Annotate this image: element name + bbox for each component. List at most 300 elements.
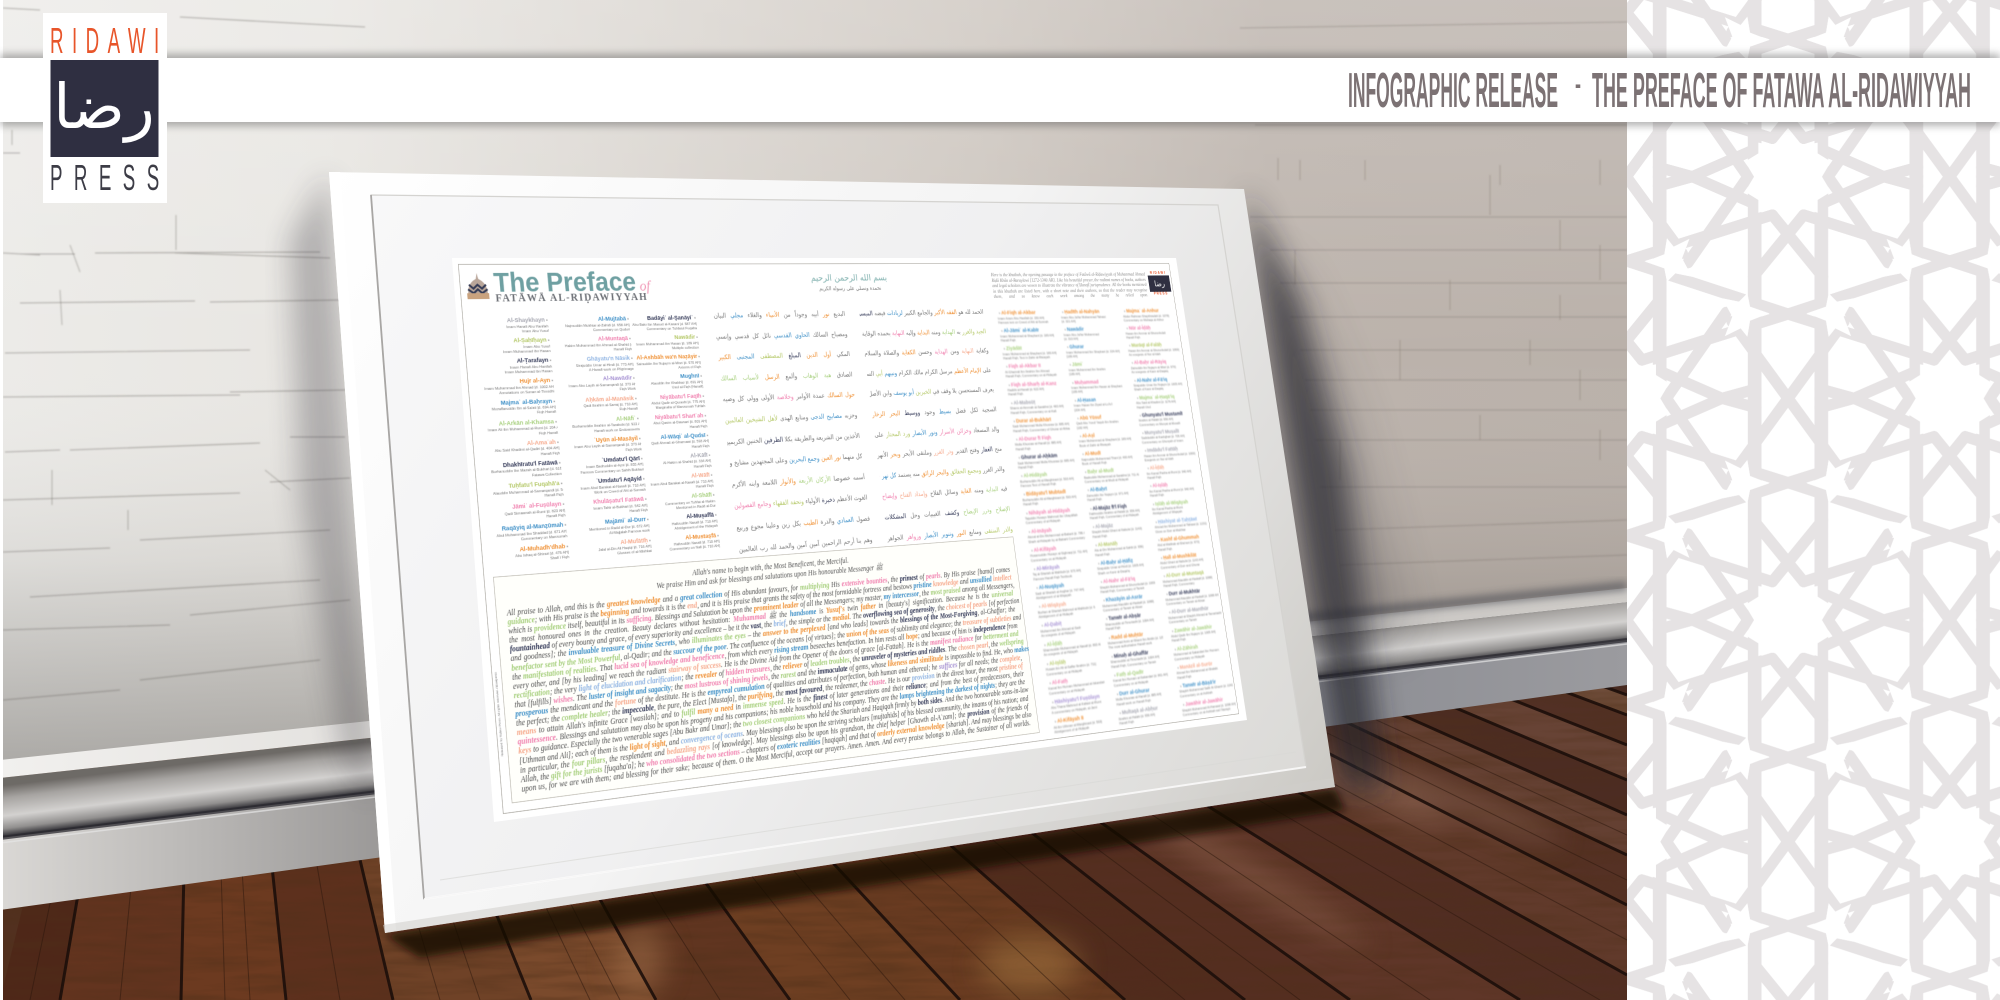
- right book list column 1: Al-Mabsūṭ: [1013, 399, 1036, 406]
- right book list column 1: Imam Muhammad al-Shaybani [d. 189 AH]: [1002, 351, 1057, 356]
- book list column 1: Ḥujr al-Ayn: [519, 377, 551, 385]
- right book list column 3: Al-Iṣlāḥ: [1152, 482, 1168, 489]
- book list column 3: Usul al-Fiqh [Hanafi]: [672, 384, 703, 390]
- right book list column 3: Gloss on Durr al-Mukhtar: [1155, 528, 1186, 534]
- book list column 3: Hanafi Fiqh: [689, 424, 708, 429]
- book list column 3: Al-Mustaṣfā: [685, 532, 716, 541]
- book list column 2: Majāmiʿ al-Durr: [605, 516, 646, 526]
- right book list column 2: Imam Muhammad Ibn Shaybani [d. 334 AH]: [1066, 349, 1120, 355]
- right book list column 1: Tajuddin Husayn Mahmud ibn Ubaydillah: [1025, 513, 1078, 521]
- right book list column 2: Sharh on Kanz al-Daqa'iq: [1098, 569, 1130, 576]
- book list column 1: Imam Hanafi Abu Hanifah: [510, 364, 552, 370]
- right book list column 1: Hanafi Fiqh: [1001, 338, 1016, 343]
- book list column 3: Qadi Ahmad al-Ghaznawi [d. 593 AH]: [651, 439, 709, 446]
- translation paragraph: [Uthman and Ali]; each of them is the light of sight, and convergence of oceans. May blessings also be upon the striving scholars [mujtahids] of his blessed community, the imams of his nation; and: [519, 694, 1029, 766]
- translation paragraph: the most honoured ones in the creation. Beauty declares without hesitation: Muhammad ﷺ the handsome is Yusuf's twin father in [beauty's] signification. Because he is the universal: [509, 589, 1014, 645]
- book list column 3: Abridgement of the Hidayah: [674, 524, 718, 531]
- right book list column 2: Hanafi Fiqh, Commentary on Tanwir: [1111, 660, 1156, 669]
- book list column 2: ʿUmdatu'l Aqāyid: [596, 475, 642, 485]
- right book list column 2: Badruddin Muhammad al-Sarakhsi [d. 711 AH]: [1084, 472, 1140, 480]
- book list column 2: Jalal al-Din Ali Haqiqi [d. 716 AH]: [598, 544, 652, 553]
- book list column 2: ʿUmdatu'l Qārī: [601, 455, 640, 464]
- book list column 3: Al-Shāfī: [691, 492, 712, 500]
- right book list column 3: Abridgement of Wiqayah: [1152, 510, 1183, 516]
- right book list column 2: Jāmiʿ: [1072, 361, 1084, 368]
- right book list column 1: Commentary on al-Hidayah: [1031, 556, 1067, 563]
- right book list column 2: Book of Zahir al-Riwayah: [1079, 442, 1111, 448]
- arabic khutbah column A: حول السالك عمدة الأوامر وخلاصة الأولى وولي كل وصيه: [722, 392, 855, 403]
- right book list column 3: Majmaʿ al-Ḥaqā'iq: [1139, 393, 1175, 401]
- arabic khutbah column B: السجية لكل فضل بسيط وجود ووسيط البحر الزخار: [872, 406, 997, 418]
- right book list column 3: Al-Durr al-Manthūr: [1171, 605, 1209, 616]
- right book list column 1: Husain ibn Ali al-Saffar Ibrahim [d. 711]: [1046, 662, 1096, 672]
- right book list column 1: Ziyādāt: [1006, 345, 1022, 352]
- book list column 2: Imam Badruddin al-Ayni [d. 855 AH]: [586, 462, 644, 470]
- right book list column 2: Minaḥ al-Ghaffār: [1113, 649, 1149, 660]
- arabic khutbah column B: فيه البداية ومنه الغاية وسائل الفلاح وإمداد الفتاح وإيضاح: [882, 486, 1008, 501]
- right book list column 1: Taj al-Shariah al-Mahbubi [d. 673 AH]: [1033, 569, 1081, 577]
- right book list column 3: Muhammad al-Shaykh Ahmad al-Tamartashi: [1168, 611, 1222, 620]
- banner title: INFOGRAPHIC RELEASE: [1348, 64, 1558, 118]
- bismillah heading: بسم الله الرحمن الرحيم: [810, 272, 887, 283]
- translation heading: Allah's name to begin with, the Most Beneficent, the Merciful.: [692, 556, 849, 577]
- right book list column 1: Famous Text of Hanafi Fiqh: [1020, 482, 1056, 488]
- right book list column 3: Commentary on Ghunyah of Imam: [1142, 439, 1183, 445]
- right book list column 2: Kamal Ibn Humam al-Sakandari [d. 861 AH]: [1113, 673, 1168, 683]
- book list column 2: Aḥkām al-Manāsik: [585, 395, 634, 403]
- translation paragraph: fountainhead of every bounty and grace, of every superiority and excellence – be it the vast, the brief, the simple or the medial. The overflowing sea of generosity, the choicest of pearls [of perfection: [509, 597, 1020, 654]
- translation paragraph: in particular, the four pillars, the resplendent and bedazzling rays [of knowledge]. May blessings also be upon his grandson, the chief helper [Ghawth al-Aʿzam]; the provision of the friends of: [520, 702, 1029, 775]
- right book list column 2: [189 AH]: [1072, 390, 1083, 394]
- book list column 2: A Hanafi work on Pilgrimage: [589, 367, 634, 373]
- logo: Ridawi Press: RIDAWI: [50, 22, 159, 62]
- right book list column 1: Imam Muhammad al-Shaybani [d. 189 AH]: [1000, 333, 1054, 338]
- book list column 2: Glosses of al-Mishkat: [617, 549, 652, 556]
- right book list column 1: Ghurar al-Aḥkām: [1021, 452, 1058, 461]
- logo: Ridawi Press: PRESS: [50, 159, 159, 199]
- right book list column 1: Hanafi Fiqh: [1023, 502, 1038, 507]
- right book list column 2: [1060, 308, 1168, 726]
- book list column 3: Hanafi Fiqh: [696, 483, 714, 489]
- right book list column 3: Munyatu'l Muṣallī: [1144, 428, 1180, 436]
- right book list column 1: Hanafi Fiqh: [1018, 465, 1033, 470]
- book list column 2: Al-Mujtabā: [598, 315, 626, 323]
- translation paragraph: that [fulfills] wishes. The luster of insight and sagacity; the most lustrous of shining jewels, the rarest and the immaculate of gems, whose likeness and similitude is impossible to find. He, who makes: [514, 645, 1029, 710]
- right book list column 2: [204 AH]: [1074, 408, 1085, 412]
- right book list column 1: Burhanuddin Ali al-Marghinani [d. 593 AH]: [1020, 477, 1074, 484]
- right book list column 2: Multaqā al-Abḥur: [1122, 705, 1158, 716]
- mini logo: RIDAWI: [1150, 271, 1166, 275]
- book list column 3: Mughnī: [680, 373, 700, 380]
- right book list column 3: Hanafi Fiqh: [1158, 547, 1172, 552]
- book list column 3: Hanafi Fiqh: [694, 464, 712, 469]
- picture frame: [329, 172, 1335, 933]
- right book list column 1: Durar al-Bukhārī: [1016, 416, 1051, 424]
- right book list column 1: Al-Durar fī Fiqh: [1018, 434, 1052, 443]
- book list column 2: Al-Nawādir: [603, 375, 632, 383]
- right book list column 2: Hanafi Fiqh: [1106, 626, 1121, 632]
- book list column 3: Imam Muhammad ibn Hasan [d. 189 AH]: [636, 341, 699, 347]
- vertical credit line: Released by Ridawi Press. All rights reserved. ridawipress: [494, 672, 504, 757]
- book list column 1: Hanafi Fiqh: [546, 513, 566, 519]
- book list column 2: Ghāyatu'n Nāsik: [586, 355, 630, 363]
- right book list column 2: Shaykh Muhammad al-Shurunbulali [d. 1069]: [1100, 581, 1156, 590]
- right book list column 2: Zainuddin Ibn Nujaym [d. 971 AH]: [1086, 491, 1129, 498]
- book list column 3: Commentary on Nafi [d. 710 AH]: [669, 544, 720, 552]
- right book list column 2: Mulla Khusraw al-Hanafi [d. 885 AH]: [1116, 692, 1162, 702]
- arabic khutbah column B: والدر المنتقى ومنابع النور وتنوير الأبصار وزواهر الجواهر: [887, 526, 1013, 542]
- right book list column 2: Sirajuddin Umar al-Hindi [d. 1005 AH]: [1097, 563, 1144, 571]
- right book list column 2: Baḥr al-Mudī: [1087, 467, 1114, 475]
- wooden floor planks: [3, 685, 1627, 1000]
- right book list column 2: Al-Majāz fī'l Fiqh: [1092, 503, 1127, 512]
- right book list column 3: Abdur Rahman Shaykhzadah [d. 1078]: [1123, 314, 1169, 318]
- book list column 2: Al-Mufātīḥ: [620, 537, 648, 546]
- right book list column 3: Shaykh Muhammad Salih Al-Ghazzi [d. 1041]: [1179, 683, 1234, 694]
- right book list column 1: Abu Thana Mahmud al-Kafawi al-Rumi: [1051, 700, 1102, 711]
- right book list column 3: Commentary on Hidayah: [1174, 654, 1205, 662]
- right book list column 1: Fiqh al-Akbar II: [1008, 363, 1041, 370]
- book list column 2: Commentary on Quduri: [593, 327, 630, 332]
- right book list column 2: Imam Abu Ja'far Muhammad Tahawi: [1061, 315, 1106, 319]
- right book list column 2: Muhammad Alauddin al-Haskafi [d. 1088]: [1102, 599, 1154, 608]
- right book list column 2: Commentary on al-Mudi al-Hidayah: [1084, 477, 1129, 484]
- right book list column 3: Commentary on al-Ashbah: [1180, 690, 1213, 699]
- book list column 1: Imam Abu Yusuf: [522, 329, 549, 334]
- right book list column 1: Al-Hidāyah: [1023, 471, 1048, 479]
- right book list column 3: Ḥall al-Mushkilāt: [1163, 552, 1197, 561]
- right book list column 1: Shams al-Aimmah al-Sarakhsi [d. 483 AH]: [1010, 404, 1064, 411]
- book list column 2: Khulāṣatu'l Fatāwā: [593, 496, 644, 506]
- book list column 3: Abul Qasim al-Dawsari [d. 801 AH]: [653, 419, 707, 426]
- logo: Ridawi Press: [43, 13, 167, 203]
- arabic khutbah column B: يعرف المستحسن بلا وقف في الخيرين أبو يوسف وابن الأصل: [868, 387, 994, 398]
- right book list column 3: Zainuddin ibn Nujaym al-Misri [d. 970]: [1131, 365, 1176, 370]
- frame cast shadows: [290, 172, 1400, 958]
- subheading: Fatawa al-Ridawiyyah: FATĀWĀ AL-RIḌAWIYYAH: [495, 291, 648, 304]
- arabic khutbah column B: الإصلاح ودرر الإيضاح وكشف الغيبيات وحل المشكلات: [884, 506, 1010, 521]
- right book list column 1: Al-Ḍabiṭ: [1044, 620, 1062, 629]
- right book list column 1: Husamuddin Husayn al-Sighnaqi [d. 711 AH]: [1030, 549, 1088, 558]
- right book list column 1: An exegesis of al-Hidayah: [1041, 631, 1075, 638]
- book list column 2: Imam Tahir al-Bukhari [d. 542 AH]: [593, 503, 648, 511]
- right book list column 1: [997, 309, 1105, 735]
- right book list column 2: Hanafi Fiqh, Commentary of Tanwir: [1100, 586, 1145, 594]
- book list column 1: Imam Muhammad ibn Ahmad [d. 1002 AH]: [484, 384, 555, 391]
- mini logo: رضا: [1154, 279, 1165, 289]
- arabic khutbah column B: وكفاية النهاية ومن الهداية وحسن الكفاية والصلاة والسلام: [864, 348, 989, 357]
- translation paragraph: which is providence itself, beautiful in its sufficing. Blessings and Salutation be upon the prominent leader of all the Messengers; my master, my intercessor, the most praised among all Messengers,: [508, 581, 1015, 636]
- left photo edge: [0, 0, 3, 1000]
- right book list column 2: Ala al-Din Muhammad al-Sahib [d. 956]: [1094, 545, 1144, 553]
- mini logo: [1148, 271, 1172, 296]
- right book list column 1: Sadr al-Shariah al-Asghar [d. 747 AH]: [1035, 587, 1084, 596]
- book list column 3: Al-Muṣaffā: [686, 512, 714, 521]
- right book list column 2: Commentary on al-Hidayah: [1114, 679, 1149, 688]
- book list column 1: Abu Said Khadimi al-Qadiri [d. 404 AH]: [495, 446, 560, 454]
- right book list column 2: Fatḥ al-Qadīr: [1116, 669, 1144, 678]
- book list column 3: Hanafi Fiqh: [692, 444, 710, 449]
- arabic khutbah column A: أسمه خصوصا الأركان الأربعة والأنوار اللامعة وابنه الأكرم: [732, 474, 865, 489]
- translation paragraph: every other, and [by his leading] we reach the radiant stairway of success. He is the Divine Aid from the Opener of the doors of grace [al-Fattah]. He is the manifest radiance for betterment and: [513, 629, 1019, 691]
- right book list column 2: Shamsuddin al-Timurtashi [d. 1004 AH]: [1110, 655, 1160, 665]
- right book list column 3: Abdul Ghani al-Nabulsi [d. 1143 AH]: [1160, 558, 1203, 566]
- book list column 2: Imam Abu Layth al-Samarqandi [d. 373 AH]: [568, 382, 636, 389]
- book list column 3: Imam Abul Barakat al-Nasafi [d. 710 AH]: [650, 479, 713, 487]
- right book list column 1: Al-Fatḥ: [1052, 678, 1068, 686]
- book list column 1: Al-Amaʿah: [527, 438, 556, 447]
- right book list column 1: Nihāyah al-Hidāyah: [1028, 507, 1070, 516]
- right book list column 3: Hasan ibn Ammar al-Shurunbulali: [1125, 331, 1166, 336]
- right book list column 3: Zawāhir al-Jawāhir: [1174, 623, 1212, 634]
- book list column 3: Commentary on Tuhfatul Fuqaha: [646, 326, 697, 331]
- right book list column 2: Hanafi Fiqh: [1092, 534, 1107, 539]
- right book list column 2: [189 AH]: [1067, 355, 1078, 359]
- right book list column 2: Al-Baḥr al-Ḥāfiẓ: [1100, 557, 1133, 567]
- right book list column 3: Abu Said al-Khadimi [d. 1176 AH]: [1136, 400, 1176, 405]
- right book list column 1: Sadr Muhammad Mulla Khusraw [d. 885 AH]: [1012, 422, 1069, 429]
- book list column 1: Annotations on Sunan al-Tirmidhi: [499, 389, 554, 396]
- right book list column 3: Commentary on al-Ashbah wa'l Nazayir: [1183, 707, 1231, 717]
- translation paragraph: prosperous the mendicant and the fortune of the destitute. He is the empyreal cumulation of qualities and attributes of perfection, both human and ethereal; he suffices for all needs; the complete,: [515, 654, 1022, 719]
- right book list column 2: Tanwīr al-Abṣār: [1108, 612, 1141, 622]
- book list column 2: Al-Nāfiʿ: [616, 415, 636, 423]
- right book list column 2: Abū Yūsuf: [1079, 414, 1102, 421]
- book list column 2: Mentioned in Radd al-Dur [d. 672 AH]: [589, 523, 650, 532]
- book list column 1: Al-Muhadh'dhab: [519, 542, 566, 553]
- banner title: -: [1575, 68, 1581, 101]
- right book list column 3: Sharh of Kanz al-Daqaiq: [1134, 387, 1164, 392]
- book list column 1: Fiqh Hanafi: [539, 430, 558, 436]
- right book list column 1: Hanafi Fiqh, Text in Zahir al-Riwayah: [1003, 355, 1050, 361]
- book list column 3: Abu Bakr ibn Masud al-Kasani [d. 587 AH]: [632, 321, 697, 327]
- right book list column 1: Hadithi al-Hanafi [d. 622 AH]: [1007, 387, 1044, 393]
- right book list column 2: Al-Manāḥ: [1097, 540, 1118, 548]
- book list column 1: [484, 316, 570, 561]
- book list column 3: Marginalia of Manzumah Tuhfah: [656, 404, 705, 410]
- right book list column 1: Mulla Khusraw al-Hanafi [d. 885 AH]: [1015, 441, 1062, 447]
- arabic khutbah column A: وحزبه مصابيح الدجى ومنابع الهدى لأهل الشيخين العالمين: [725, 412, 858, 425]
- right book list column 1: Fiqh al-Sharḥ al-Kanz: [1011, 380, 1057, 388]
- right book list column 1: Hanafi Fiqh, Commentary of Ghurar al-Ahkam: [1013, 426, 1070, 433]
- right book list column 3: Al-Baḥr al-Rāyiq: [1134, 359, 1167, 366]
- right book list column 1: Al-Ghazzali Ibn Ibrahim Ibn Ahmad: [1005, 369, 1050, 374]
- translation paragraph: rectification; the very light of elucidation and clarification; the revealer of hidden treasures, the reliever of leaden troubles, the unraveler of mysteries and riddles. The chosen pearl, the wellspring: [513, 637, 1024, 700]
- book list column 2: Qadi Ibrahim al-Sarraj [d. 710 AH]: [583, 402, 638, 408]
- right book list column 3: Al-Īḍāḥ: [1149, 464, 1165, 471]
- book list column 3: Al-Ashbāh wa'n Naẓāyir: [636, 353, 698, 362]
- right book list column 3: Sirajuddin Umar ibn Nujaym [d. 1005 AH]: [1133, 382, 1182, 388]
- right book list column 2: Nawādir: [1067, 326, 1084, 333]
- book list column 3: Abdul Qadir al-Qurashi [d. 775 AH]: [651, 399, 705, 406]
- right book list column 1: Famous Hanafi Fiqh Textbook: [1033, 574, 1072, 582]
- book list column 1: Dhakhīratu'l Fatāwā: [503, 459, 558, 469]
- book list column 2: Al-Muntaqā: [598, 335, 628, 343]
- translation paragraph: Allah, the gift for the jurists [fuqaha'a]; he who consolidated the two sections – chapters of exoteric realities [haqiqah] and that of orderly external knowledge [shariah]. And may blessings be also: [520, 710, 1032, 784]
- book list column 1: Abu Ishaq al-Shirazi [d. 476 AH]: [515, 550, 569, 559]
- right book list column 2: Al-Nahr al-Fā'iq: [1103, 576, 1136, 585]
- right book list column 2: Muḥammad: [1074, 379, 1099, 386]
- book list column 3: Axioms of Fiqh: [678, 365, 701, 370]
- translation paragraph: [506, 566, 1032, 794]
- right book list column 3: Marāqī al-Falāḥ: [1131, 342, 1162, 349]
- book list column 1: Abul Muhammad Ibn Shaddad [d. 671 AH]: [496, 529, 568, 538]
- right book list column 1: A commentary on Hidayah, al-Jami: [1051, 705, 1097, 715]
- book list column 1: Muzaffaruddin Ibn al-Sa'ati [d. 694 AH]: [492, 405, 556, 412]
- skirting board: [0, 586, 1627, 910]
- right book list column 3: Commentary on Multaqa al-Abhur: [1123, 318, 1164, 322]
- poster: The Preface of Fatawa al-Ridawiyyah: [458, 263, 1239, 814]
- right book list column 3: Hanafi Fiqh, Commentary: [1163, 581, 1195, 588]
- right book list column 3: Ahmad Ibn Muhammad al-Shalabi: [1176, 667, 1218, 676]
- translation paragraph: guidance; with His praise is the beginning and towards it is the end, and it is His praise that grants the safety of the most formidable fortress and bestows pristine knowledge and unsullied intellect: [507, 573, 1012, 627]
- right book list column 3: Majmaʿ al-Anhur: [1126, 308, 1159, 314]
- right book list column 1: Al-Jāmiʿ al-Kabīr: [1003, 327, 1039, 334]
- book list column 3: Alauddin ibn Khabbaz [d. 691 AH]: [651, 380, 703, 386]
- book list column 3: Al-Kāfī: [690, 452, 708, 460]
- book list column 2: Hanafi work on Endowments: [594, 427, 640, 433]
- right book list column 2: The most authoritative Hanafi work: [1108, 641, 1152, 650]
- right book list column 2: Durr al-Ghurar: [1119, 687, 1150, 697]
- right book list column 1: Burhanuddin Ali al-Marghinani [d. 593 AH]: [1022, 495, 1076, 502]
- translation paragraph: the perfect; the complete healer; the impeccable, the pure, the Elect [Mustafa], the purifying, the most favoured, the redeemer, the chaste. He is our provision in the direst hour, the most pristine of: [516, 662, 1023, 728]
- book list column 3: Al-Wāqiʿ al-Qudsī: [660, 432, 706, 441]
- right book list column 3: Hasan ibn Ammar al-Shurunbulali [d. 1069]: [1128, 348, 1179, 353]
- right book list column 1: Commentary on al-Hidayah: [1046, 668, 1082, 677]
- right book list column 2: Imam Hasan Ibn Ziyad al-Lu'lu'i: [1074, 402, 1113, 408]
- translation paragraph: All praise to Allah, and this is the greatest knowledge and a great collection of His abundant favours, for multiplying His extensive bounties, the primest of pearls. By His praise [hamd] comes: [506, 566, 1010, 618]
- right book list column 3: Sadiduddin al-Kashghari [d. 705 AH]: [1141, 434, 1185, 441]
- right book list column 2: Shamsuddin al-Timurtashi [d. 1004 AH]: [1105, 618, 1154, 627]
- right book list column 2: Imam Muhammad Ibn Hasan al-Shaybani: [1071, 384, 1123, 390]
- right book list column 1: Hanafi Fiqh, Commentary on al-Kafi: [1010, 409, 1057, 415]
- right book list column 3: Ibn Kamal Pasha al-Rumi [d. 940 AH]: [1146, 469, 1191, 476]
- right book list column 1: Abridgement of al-Wiqayah: [1036, 593, 1072, 601]
- right book list column 2: Hanafi Fiqh: [1095, 552, 1110, 557]
- right book list column 1: Sharh al-Hidayah by al-Babarti Commentary: [1028, 535, 1085, 544]
- arabic khutbah column B: والد المسعاد وخزائن الأسرار ونور الأبصار ورد المحتار على: [874, 426, 1000, 439]
- picture mat: [371, 195, 1306, 899]
- right book list column 2: Al-Baḥrī: [1090, 486, 1107, 493]
- book list column 1: Al-Ṭarafayn: [517, 357, 549, 365]
- arabic khutbah column A: فصول العمادي والدرة الطيب بكل زين وعلينا مجوع وربيع: [736, 516, 870, 532]
- right book list column 2: Hanafi Fiqh, Commentary of al-Hidayah: [1090, 513, 1139, 521]
- right book list column 3: Nūr al-Īḍāḥ: [1128, 325, 1151, 331]
- right book list column 3: Commentary on Munyat al-Musalli: [1139, 421, 1180, 427]
- right book list column 1: Muhammad ibn Ahmad al-Sadr: [1040, 625, 1081, 634]
- right book list column 2: Hanafi Fiqh: [1087, 497, 1102, 502]
- book list column 1: Hanafi Fiqh: [541, 451, 560, 456]
- translation paragraph: means to attain Allah's infinite Grace [wasilah]; and to fulfil many a need in immense speed. He is the finest of later generations and their reliance; and from the best of predecessors, their: [516, 670, 1024, 737]
- book list column 1: Qadi Simawnah al-Rumi [d. 823 AH]: [505, 508, 565, 517]
- right book list column 2: Imam Abu Ja'far Muhammad: [1063, 332, 1099, 337]
- book list column 1: Imam Muhammad ibn Hasan: [505, 369, 553, 375]
- right book list column 3: Hanafi Fiqh: [1126, 336, 1140, 340]
- right book list column 3: Ghunyatu'l Mustamlī: [1141, 410, 1183, 418]
- book list column 2: Al-Majjalah Famous work: [609, 528, 650, 536]
- right book list column 1: Al-Iṣlāḥ: [1049, 658, 1066, 667]
- arabic khutbah column B: [858, 308, 1013, 542]
- right book list column 3: Jawāhir al-Jawāhir: [1185, 696, 1223, 708]
- right book list column 1: Hanafi Fiqh: [1015, 447, 1031, 452]
- right book list column 3: Commentary on Tanwir: [1169, 618, 1197, 625]
- book list column 1: Raqāyiq al-Manẓūmah: [501, 521, 564, 533]
- right book list column 3: Ahmad ibn Muhammad al-Tahtawi [d. 1231]: [1154, 522, 1207, 530]
- book list column 1: Al-Ṣaḥīḥayn: [513, 337, 547, 344]
- right book list column 3: Muhammad Alauddin al-Haskafi [d. 1088 AH]: [1165, 593, 1220, 602]
- book list column 2: Najmuddin Mukhtar al-Zahidi [d. 658 AH]: [565, 323, 630, 328]
- right book list column 3: Hanafi Fiqh: [1177, 674, 1192, 680]
- right book list column 3: Muhammad Alauddin al-Haskafi [d. 1088]: [1163, 575, 1213, 584]
- translation paragraph: the manifestation of realities. That lucid sea of knowledge and beneficence, from which every rising stream beseeches benefaction. In him rests all hope; and because of him is independence from: [512, 621, 1018, 682]
- right book list column 2: Shaykh Abdul Ghani al-Nabulsi [d. 1143]: [1092, 527, 1142, 535]
- right book list column 1: Hanafi Fiqh: [1008, 392, 1023, 397]
- right book list column 3: [1123, 308, 1236, 717]
- right book list column 3: An exegesis of Nur al-Idah: [1129, 352, 1161, 357]
- mini logo: PRESS: [1154, 292, 1168, 296]
- right book list column 3: Abdul Qadir Ibn Nujaym [d. 1005 AH]: [1171, 630, 1216, 639]
- right book list column 3: Ibn Kamal Pasha al-Rumi: [1152, 505, 1183, 512]
- book list column 1: Fiqh Hanafi: [537, 410, 556, 415]
- book list column 2: [564, 315, 652, 556]
- right book list column 2: Al-Aṣl: [1082, 432, 1095, 439]
- right book list column 3: Commentary on Tanwir al-Absar: [1166, 599, 1205, 606]
- right book list column 1: Sadr Muhammad Mulla Khusraw [d. 885 AH]: [1017, 458, 1075, 466]
- right book list column 2: Ibrahim al-Halabi [d. 956 AH]: [1118, 712, 1155, 721]
- right book list column 3: Kashf al-Ghummah: [1160, 534, 1199, 543]
- right book list column 2: Book of Hanafi Fiqh: [1082, 461, 1107, 466]
- salutation line: نحمده ونصلي على رسوله الكريم: [819, 286, 882, 292]
- book list column 2: Imam Abu Layth al-Samarqandi [d. 373 AH]: [574, 442, 642, 450]
- right book list column 3: Ibrahim al-Halabi [d. 956 AH]: [1139, 417, 1173, 423]
- right book list column 1: Al-Kifāyah II: [1057, 714, 1084, 725]
- right book list column 1: Al-Mirāyah: [1036, 564, 1060, 572]
- right book list column 1: Commentary of al-Hidayah: [1026, 519, 1061, 525]
- heading: The Preface of: The Preface of: [492, 267, 651, 298]
- arabic khutbah column A: المكي أول الدين المبلغ المصطفى المجتبى الكبير: [718, 351, 850, 361]
- right book list column 1: Al-Ināyah: [1031, 527, 1052, 535]
- right book list column 2: [d. 310 AH]: [1064, 337, 1078, 341]
- book list column 3: Multiple collection: [672, 345, 699, 350]
- right book list column 3: Hanafi Fiqh: [1171, 637, 1186, 643]
- right book list column 3: Ḥāshiyat al-Ṭaḥṭāwī: [1157, 516, 1197, 525]
- right book list column 1: Shamsuddin Muhammad al-Nasafi [d. 803 AH]: [1043, 642, 1102, 653]
- right book list column 3: Al-Durr al-Muntaqā: [1166, 569, 1204, 579]
- right book list column 3: Muhammad al-Sakandari Ibn Humam: [1174, 648, 1219, 657]
- right book list column 1: Imam Azam Abu Hanifah [d. 150 AH]: [998, 316, 1044, 321]
- right book list column 2: Al-Mudī: [1084, 450, 1101, 457]
- book list column 2: Hanafi Fiqh: [614, 347, 632, 352]
- arabic khutbah column A: البديع نور أبيه وجوداً من الأنبياء والغلاء مجلي البيان: [713, 311, 845, 320]
- book list column 2: Famous Commentary on Sahih Bukhari: [580, 467, 644, 475]
- poster paper sheet: [452, 258, 1247, 822]
- book list column 1: Imam Hanafi Abu Hanifah: [506, 324, 549, 329]
- book list column 2: Imam Abul Barakat al-Nasafi [d. 710 AH]: [580, 483, 646, 491]
- book list column 3: Badāyiʿ al-Ṣanāyiʿ: [647, 314, 693, 322]
- right book list column 1: An exegesis of al-Hidayah: [1044, 649, 1078, 658]
- right book list column 1: Famous text on Creed of Ahl al-Sunnah: [998, 320, 1049, 325]
- brick wall: [0, 0, 1627, 764]
- right book list column 2: Ḥadīth al-Nahyān: [1064, 308, 1100, 315]
- right book list column 2: Radd al-Muḥtār: [1111, 631, 1143, 641]
- book list column 2: Fiqh Work: [625, 447, 642, 452]
- book list column 2: Work on Creed of Ahl al-Sunnah: [594, 487, 646, 495]
- right book list column 1: Hanafi Fiqh, Commentary on al-Hidayah: [1005, 373, 1057, 379]
- translation paragraph: quintessence. Blessings and salutation may also be upon his progeny and his companions; his noble household and his company. They are the lamps brightening the darkest of nights; they are the: [517, 678, 1026, 747]
- book list column 2: Fiqh Work: [619, 387, 636, 392]
- book list column 2: ʿUyūn al-Masāyil: [594, 435, 638, 444]
- book list column 1: Imam Muhammad ibn Hasan: [503, 349, 551, 354]
